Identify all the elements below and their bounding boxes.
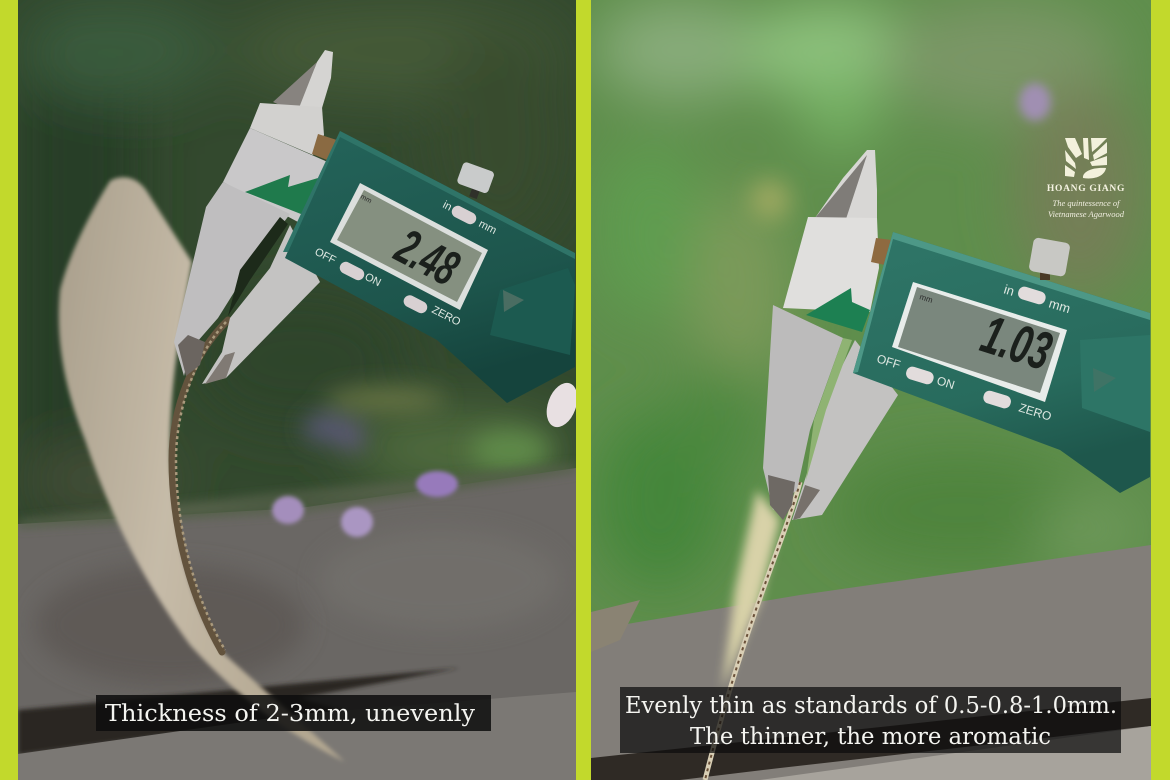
LCD reading 1.03: 1.03	[974, 304, 1059, 382]
button labels: OFF	[875, 351, 902, 372]
LCD bezel	[892, 282, 1067, 402]
logo tree icon	[1065, 138, 1107, 178]
caption: right: Evenly thin as standards of 0.5-0.8-1.0mm.	[625, 693, 1117, 719]
caliper green body	[285, 131, 575, 403]
caption: right: The thinner, the more aromatic	[690, 724, 1051, 750]
button labels: ON	[363, 271, 383, 289]
right digital caliper	[763, 150, 1150, 520]
panel: right photo, thin even sheet	[591, 0, 1151, 780]
logo: Hoang Giang	[1047, 138, 1125, 219]
caliper green body	[853, 232, 1150, 493]
caption: left: Thickness of 2-3mm, unevenly	[105, 701, 475, 727]
button labels	[875, 282, 1116, 424]
right photo blurred garden background	[591, 0, 1151, 660]
end roller	[546, 382, 576, 428]
button labels: mm	[477, 218, 498, 237]
left digital caliper	[174, 50, 583, 431]
LCD screen	[337, 190, 482, 302]
caption: right	[620, 687, 1121, 753]
green arrow on scale	[245, 175, 318, 216]
caption: left	[96, 695, 491, 731]
button labels: ZERO	[1017, 400, 1053, 424]
caliper steel jaws	[174, 50, 333, 384]
left purple flowers	[272, 471, 458, 537]
brown wear block	[871, 238, 892, 265]
left wooden table	[18, 468, 576, 780]
sheet thickness edge	[172, 320, 228, 652]
button labels: OFF	[313, 246, 338, 267]
thumb wheel knob	[1028, 237, 1071, 280]
button labels: ZERO	[430, 304, 463, 329]
button labels: in	[441, 199, 454, 214]
LCD screen	[898, 287, 1060, 393]
LCD unit: mm	[918, 292, 934, 305]
button labels: mm	[1047, 296, 1072, 316]
logo tagline second line: Vietnamese Agarwood	[1048, 209, 1125, 219]
button labels: ON	[935, 373, 956, 392]
LCD bezel	[330, 183, 488, 310]
button labels	[313, 199, 524, 329]
LCD unit: mm	[359, 194, 373, 205]
logo name: HOANG GIANG	[1047, 184, 1125, 194]
button labels: in	[1002, 282, 1016, 299]
panel: left photo, thick uneven sheet	[18, 0, 583, 780]
right thin agarwood sheet	[705, 482, 800, 780]
brown wear block	[312, 134, 336, 160]
right wooden table	[591, 545, 1151, 780]
thumb wheel knob	[456, 161, 495, 199]
caliper steel jaws	[763, 150, 898, 520]
logo tagline: The quintessence of	[1052, 198, 1121, 208]
LCD reading 2.48: 2.48	[386, 218, 469, 297]
left photo blurred garden background	[18, 0, 576, 524]
green arrow on scale	[806, 288, 870, 332]
left curved agarwood sheet	[59, 177, 345, 762]
